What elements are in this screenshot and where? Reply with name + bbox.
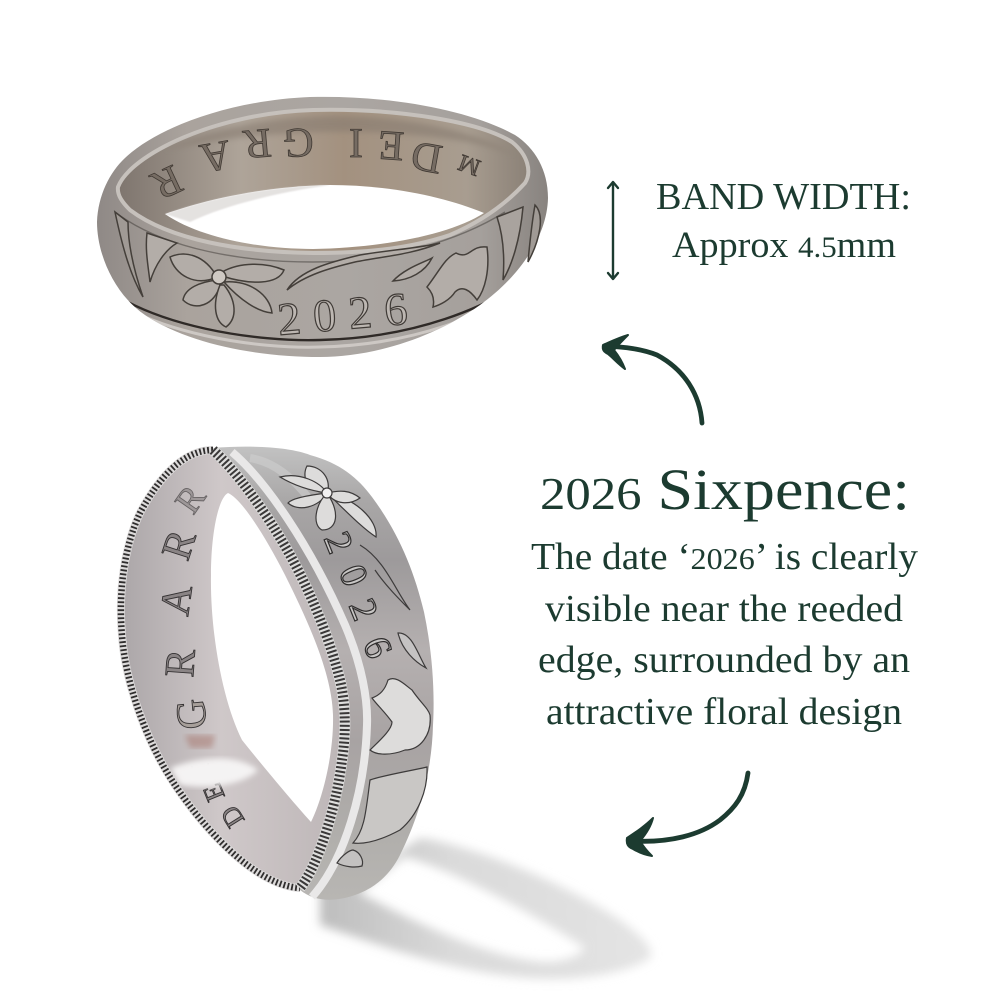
top ring inscription: M [455,149,484,180]
bottom ring date: 0 [330,559,376,592]
arrow: curved pointing to bottom ring [627,773,748,856]
top ring inscription: G [282,118,314,166]
top ring band edge and grooves [119,212,506,349]
band width label: Approx 4.5mm [672,225,896,266]
bottom ring band face [213,447,434,900]
bottom ring inscription: G [168,697,216,731]
ivy leaf [370,679,430,754]
description text: edge, surrounded by an [538,639,910,681]
bottom ring floral design [280,466,430,867]
description text: The date ‘2026’ is clearly [531,536,918,578]
left leaves [115,212,143,297]
bottom ring inscription: R [167,478,213,520]
bottom ring inscription: R [157,648,205,679]
large lined leaf [353,767,427,843]
bottom ring date: 2 [340,593,386,626]
top ring inscription: I [349,119,363,165]
bottom ring date [315,526,400,664]
bottom ring inscription: E [197,779,231,806]
bottom ring reeded edge [121,450,300,888]
bottom ring inner surface [121,450,345,888]
top ring inscription: E [377,121,405,169]
bottom ring inscription: A [152,581,202,618]
stem [360,545,410,610]
top ring inscription: A [196,131,234,181]
flower petals [170,254,217,281]
top ring inscription [144,118,484,209]
top ring floral design [115,205,540,327]
bottom ring hole [211,493,333,822]
top ring inscription: R [144,155,189,209]
bottom ring reflection [170,758,258,787]
heading: 2026 Sixpence: [540,457,910,522]
bottom ring date: 2 [315,526,361,559]
top ring inner surface [118,110,528,253]
flower petals [305,466,328,493]
top ring hole [165,185,484,249]
description text: attractive floral design [546,691,902,733]
ivy leaf [427,247,488,307]
band width label: BAND WIDTH: [656,176,911,218]
description text: visible near the reeded [545,588,903,630]
top ring inner shading [165,116,515,155]
top ring inscription: D [408,132,446,182]
bottom ring date: 6 [354,631,400,664]
top ring photo [95,97,548,357]
small bottom leaf [337,850,363,867]
right lined leaf [497,207,523,280]
icon: double-headed band width arrow [608,182,618,279]
stem [287,243,440,290]
band width label [656,176,911,266]
right small leaf [393,258,432,281]
arrow: curved pointing to top ring [603,335,702,423]
description text [531,536,918,733]
bottom ring inscription: I [186,762,216,775]
bottom ring inscription: R [153,525,206,565]
bottom ring inscription: D [214,801,250,833]
top ring date: 2026 [275,283,409,345]
bottom ring photo [121,447,434,900]
top ring inscription: R [241,119,273,167]
bottom ring inscription [152,478,250,833]
bottom ring polished rim [232,452,367,897]
bottom ring shadow [320,838,651,979]
